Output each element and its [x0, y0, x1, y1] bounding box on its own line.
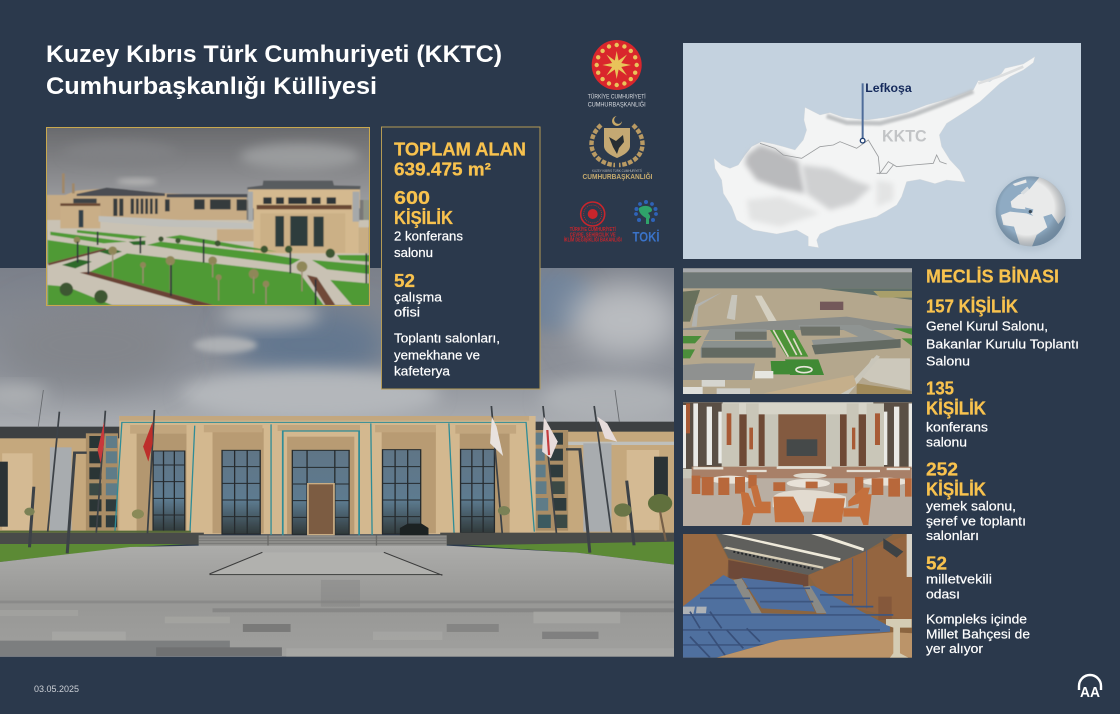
135 person conference hall: KİŞİLİK [926, 398, 986, 418]
parking and service areas [683, 355, 912, 395]
sky with clouds [0, 268, 680, 438]
wood walls [683, 534, 913, 622]
logo: AA: AA [1080, 684, 1100, 701]
right buildings [798, 325, 901, 354]
left buildings [701, 329, 776, 358]
52 offices: 52 [394, 271, 415, 291]
other facilities: yemekhane ve [394, 348, 480, 362]
main photo: presidential complex facade [0, 268, 680, 657]
hedges [48, 248, 214, 305]
logo: environment ministry: İKLİM DEĞİŞİKLİĞİ BAKANLIĞI [564, 236, 622, 244]
title [46, 41, 502, 100]
ceiling [716, 534, 893, 575]
lawns [48, 230, 369, 305]
other facilities [394, 332, 500, 378]
blue seating rows [683, 575, 893, 658]
low walls and stairs [0, 531, 674, 546]
info panel: total area and capacities [382, 127, 540, 389]
lawns [0, 542, 674, 565]
252 person dining hall: şeref ve toplantı [926, 514, 1026, 528]
52 offices: ofisi [394, 306, 420, 320]
600 person conference halls: 2 konferans [394, 230, 463, 244]
other facilities: Toplantı salonları, [394, 332, 500, 346]
logo: Türkiye presidency: TÜRKİYE CUMHURİYETİ [588, 92, 646, 100]
600 person conference halls: KİŞİLİK [394, 208, 453, 228]
front pavilion upper storey [247, 181, 361, 222]
map panel: Cyprus location [683, 43, 1081, 259]
logo: TOKİ: TOKİ [632, 230, 660, 244]
front pavilion [253, 208, 359, 254]
small trees [648, 494, 672, 513]
nation garden note: Kompleks içinde [926, 612, 1027, 626]
flagpoles, lamps and flags [24, 390, 672, 553]
title: Cumhurbaşkanlığı Külliyesi [46, 73, 377, 100]
photo: banquet hall [683, 402, 913, 526]
pillars [686, 403, 884, 470]
central block of the facade [115, 416, 536, 536]
nation garden note [926, 612, 1030, 656]
photo: auditorium [683, 534, 913, 658]
52 deputy rooms [926, 554, 992, 602]
total area: 639.475 m² [394, 160, 491, 180]
nation garden note: Millet Bahçesi de [926, 628, 1030, 642]
252 person dining hall: salonları [926, 529, 979, 543]
135 person conference hall: konferans [926, 420, 988, 434]
island of Cyprus [714, 57, 1035, 248]
canopy walkway [99, 216, 252, 228]
logo: KKTC presidency [582, 116, 652, 181]
logo: environment ministry: TÜRKİYE CUMHURİYETİ [570, 226, 616, 233]
parliament building details [926, 266, 1079, 656]
title: Kuzey Kıbrıs Türk Cumhuriyeti (KKTC) [46, 41, 502, 68]
135 person conference hall [926, 378, 988, 450]
left pavilion [60, 220, 101, 229]
logo: environment ministry [564, 202, 622, 244]
157 person halls [926, 296, 1079, 368]
Lefkoşa marker [860, 81, 912, 143]
52 offices [394, 271, 442, 320]
157 person halls: Bakanlar Kurulu Toplantı [926, 338, 1079, 352]
52 deputy rooms: milletvekili [926, 572, 992, 586]
label: KKTC: KKTC [882, 127, 927, 146]
157 person halls: Genel Kurul Salonu, [926, 320, 1048, 334]
252 person dining hall [926, 460, 1026, 543]
podium [886, 619, 912, 658]
windows [683, 402, 913, 469]
252 person dining hall: KİŞİLİK [926, 480, 986, 500]
135 person conference hall: 135 [926, 378, 954, 398]
floor [683, 478, 913, 526]
tables and chairs [692, 467, 912, 525]
252 person dining hall: 252 [926, 460, 958, 480]
157 person halls: 157 KİŞİLİK [926, 296, 1018, 316]
right and left wings of the building [0, 422, 674, 535]
logo: KKTC presidency: KUZEY KIBRIS TÜRK CUMHURİYETİ [592, 168, 642, 173]
inset photo: garden and complex overview [46, 127, 370, 306]
other facilities: kafeterya [394, 364, 450, 378]
52 deputy rooms: 52 [926, 554, 947, 574]
young trees [74, 237, 307, 287]
600 person conference halls [394, 188, 463, 260]
entrance door [308, 484, 334, 535]
rear wing [47, 188, 247, 230]
photo: aerial view of parliament building [683, 268, 913, 395]
locator globe [993, 176, 1068, 251]
parked car [400, 524, 428, 536]
52 deputy rooms: odası [926, 588, 960, 602]
central gardens [770, 330, 824, 375]
stage floor [717, 632, 913, 658]
logo: KKTC presidency: CUMHURBAŞKANLIĞI [582, 172, 652, 181]
nation garden note: yer alıyor [926, 642, 983, 656]
logo: TOKİ [632, 200, 660, 244]
157 person halls: Salonu [926, 354, 970, 368]
wood panel and screen [778, 414, 826, 466]
logo: AA [1079, 675, 1101, 701]
garden ground [47, 220, 369, 305]
heading: parliament building: MECLİS BİNASI [926, 266, 1059, 286]
logo: Türkiye presidency: CUMHURBAŞKANLIĞI [588, 100, 646, 108]
green line border [760, 140, 947, 173]
paved plaza [0, 546, 677, 657]
logo: Türkiye presidency [588, 40, 646, 108]
total area [394, 140, 526, 180]
Lefkoşa marker: Lefkoşa [865, 81, 912, 95]
date: 03.05.2025 [34, 684, 79, 695]
logo: environment ministry: ÇEVRE, ŞEHİRCİLİK VE [570, 232, 616, 238]
252 person dining hall: yemek salonu, [926, 500, 1016, 514]
135 person conference hall: salonu [926, 436, 967, 450]
glass windows [153, 449, 494, 534]
total area: TOPLAM ALAN [394, 140, 526, 160]
600 person conference halls: salonu [394, 246, 433, 260]
600 person conference halls: 600 [394, 188, 430, 208]
52 offices: çalışma [394, 290, 442, 304]
